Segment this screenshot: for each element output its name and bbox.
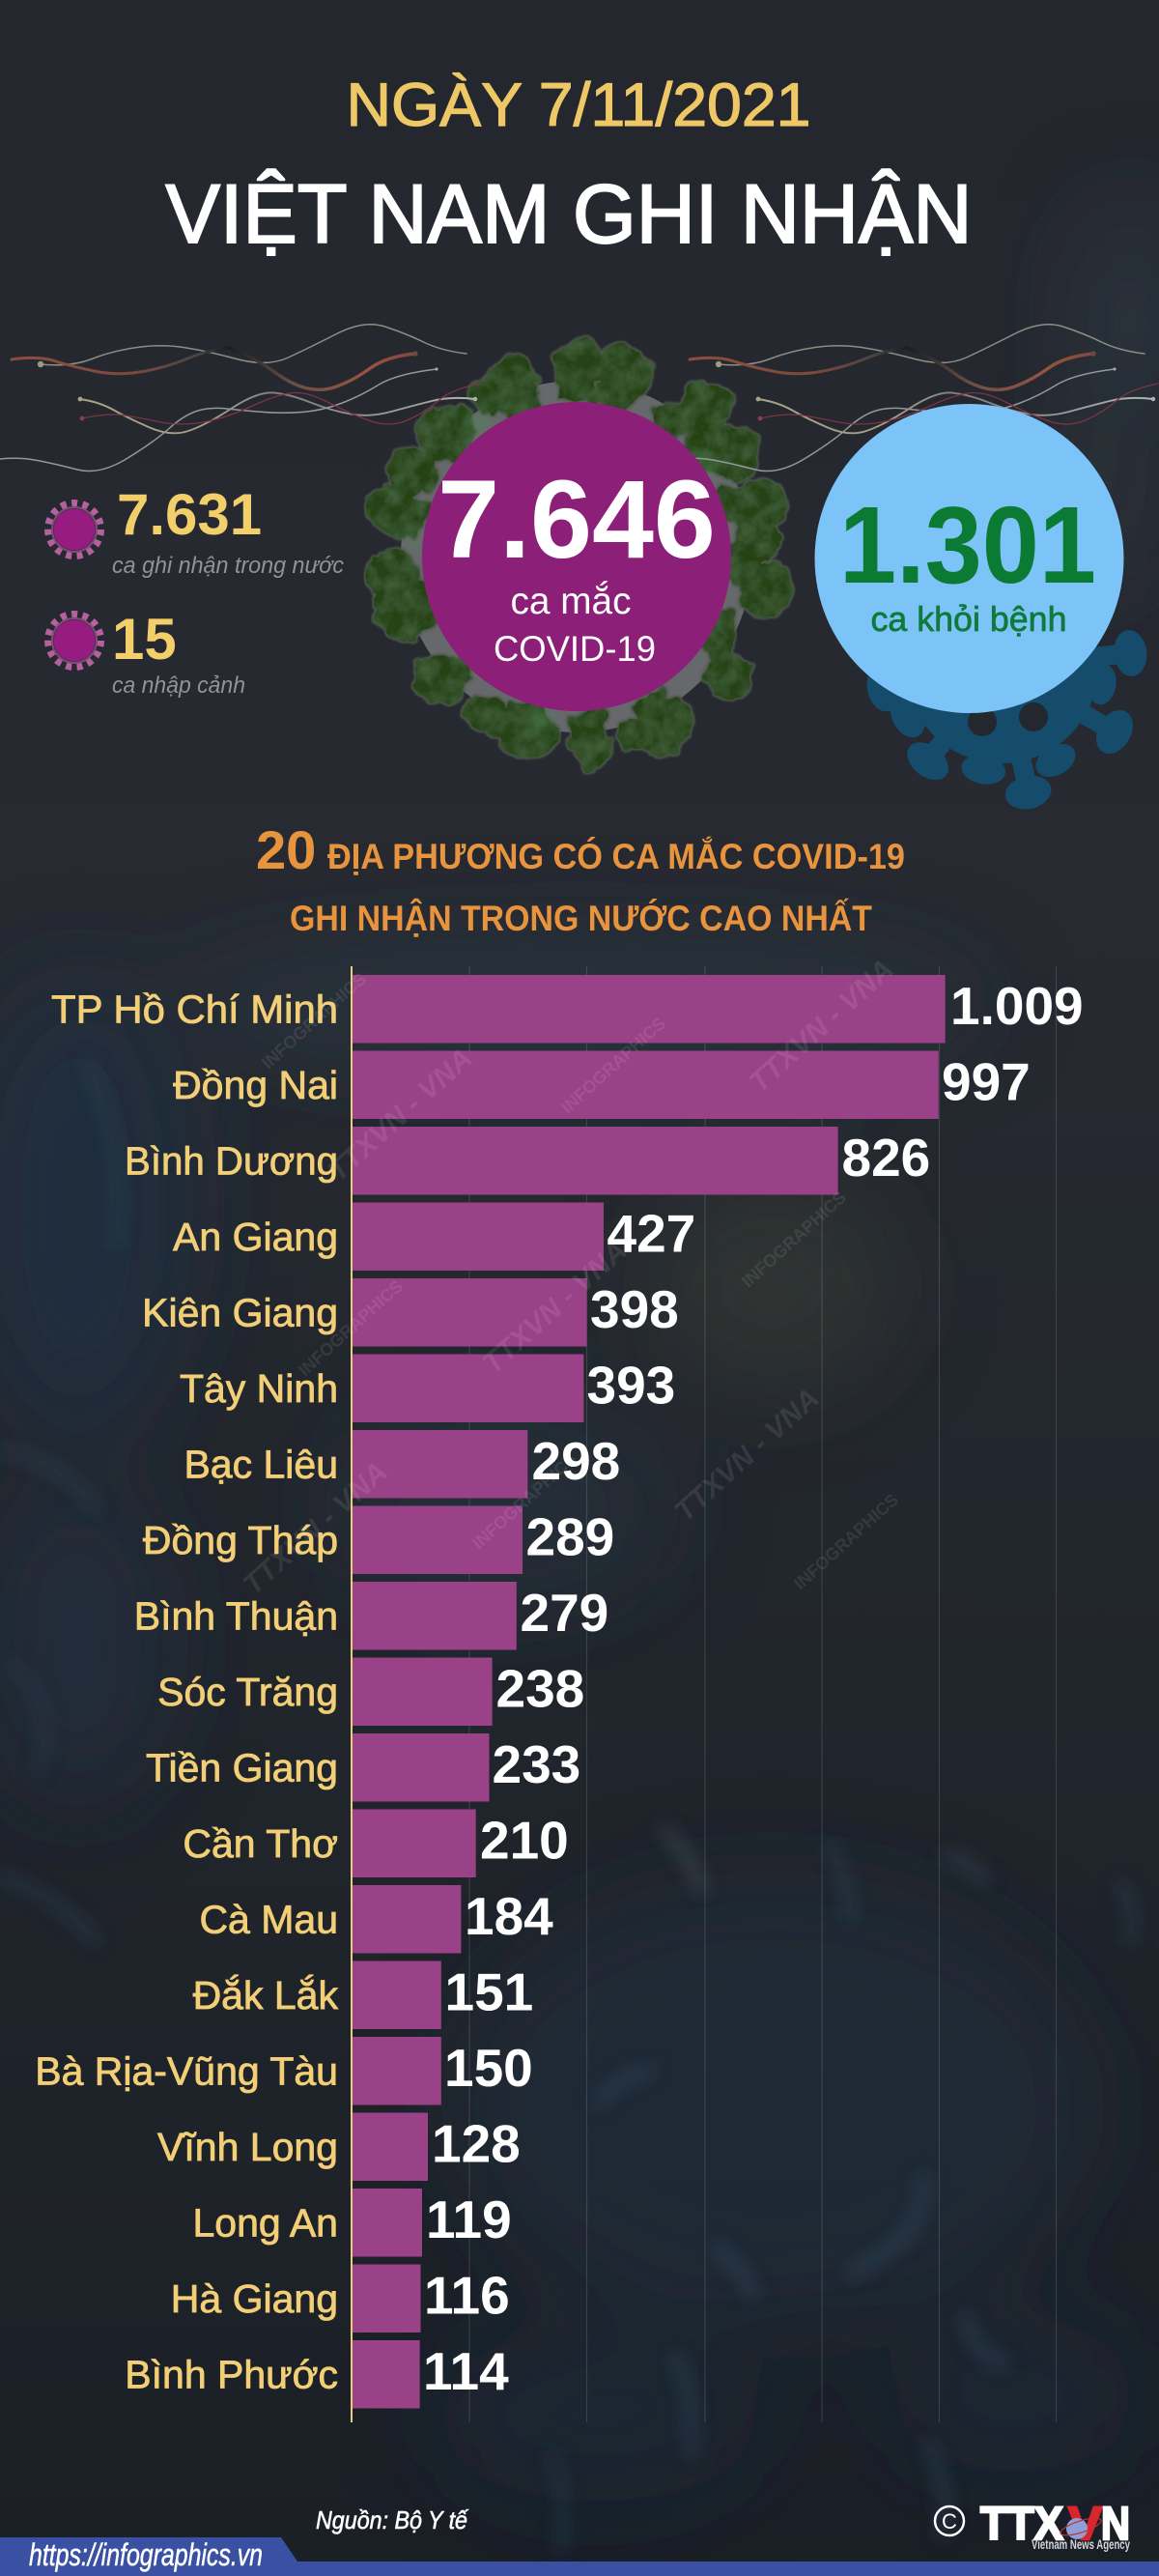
watermarks: INFOGRAPHICS [258, 969, 370, 1073]
row: Cần Thơ [183, 1809, 569, 1877]
imported label: ca nhập cảnh [112, 673, 245, 699]
row: Đắk Lắk: Đắk Lắk [193, 1973, 338, 2018]
wavy lines: left group [0, 325, 480, 472]
row: Long An: Long An [193, 2201, 338, 2246]
row: Bình Phước: Bình Phước [125, 2352, 338, 2396]
heading line 2: GHI NHẬN TRONG NƯỚC CAO NHẤT [290, 898, 872, 938]
row: Bình Thuận: 279 [520, 1583, 608, 1643]
row: Cần Thơ: Cần Thơ [183, 1821, 338, 1866]
illustration: green coronavirus [368, 338, 790, 767]
row: Bình Phước: 114 [423, 2341, 509, 2401]
total cases label line 1: ca mắc [510, 581, 632, 622]
watermarks: INFOGRAPHICS [468, 1449, 580, 1553]
total cases label line 2: COVID-19 [494, 629, 656, 669]
row: Bà Rịa-Vũng Tàu [35, 2037, 533, 2104]
row: Sóc Trăng [157, 1658, 584, 1726]
row: Bình Dương: Bình Dương [125, 1138, 338, 1183]
watermarks: TTXVN - VNA [323, 1043, 479, 1188]
icon: small purple virus [48, 502, 100, 557]
row: Kiên Giang [142, 1278, 679, 1347]
row: Vĩnh Long: 128 [432, 2114, 521, 2174]
watermarks: TTXVN - VNA [669, 1383, 826, 1528]
row: TP Hồ Chí Minh: TP Hồ Chí Minh [51, 987, 338, 1032]
row: Tiền Giang: 233 [493, 1734, 580, 1794]
row: Cà Mau [199, 1885, 553, 1954]
icon: copyright mark [935, 2506, 964, 2535]
total cases number: 7.646 [438, 458, 716, 582]
row: Đồng Tháp [143, 1505, 614, 1574]
row: Đắk Lắk: 151 [444, 1961, 533, 2021]
row: Tây Ninh: 393 [587, 1355, 675, 1415]
row: Tiền Giang: Tiền Giang [146, 1745, 338, 1789]
row: Kiên Giang: 398 [590, 1279, 679, 1339]
row: Bà Rịa-Vũng Tàu: Bà Rịa-Vũng Tàu [35, 2048, 338, 2093]
logo: TTXVN wordmark: N [1101, 2499, 1130, 2550]
logo: TTXVN wordmark [980, 2499, 1130, 2550]
row: Đồng Nai: Đồng Nai [173, 1063, 338, 1107]
icon: copyright mark: C [942, 2509, 957, 2533]
logo: TTXVN wordmark: TTX [980, 2499, 1063, 2550]
imported number: 15 [112, 607, 177, 672]
row: An Giang: An Giang [173, 1215, 338, 1259]
row: Tây Ninh: Tây Ninh [180, 1366, 338, 1411]
stat circle: total cases [422, 402, 731, 711]
domestic number: 7.631 [117, 482, 262, 547]
row: An Giang [173, 1202, 695, 1271]
row: Bình Thuận: Bình Thuận [134, 1594, 338, 1639]
row: Hà Giang [171, 2265, 510, 2333]
row: Vĩnh Long [157, 2112, 521, 2181]
source note: Nguồn: Bộ Y tế [316, 2505, 468, 2534]
row: An Giang: 427 [607, 1204, 695, 1264]
logo: TTXVN wordmark: V [1068, 2499, 1102, 2550]
recovered label: ca khỏi bệnh [871, 599, 1066, 639]
title: date: NGÀY 7/11/2021 [346, 72, 811, 139]
row: Hà Giang: Hà Giang [171, 2276, 338, 2321]
row: Bình Dương: 826 [842, 1128, 930, 1188]
chart heading [256, 819, 905, 938]
row: Hà Giang: 116 [424, 2265, 510, 2325]
stat circle: recovered [815, 404, 1124, 713]
bar chart [35, 966, 1084, 2422]
stat: imported cases [48, 607, 245, 699]
copyright logo [935, 2499, 1130, 2552]
row: Long An: 119 [426, 2190, 512, 2249]
watermarks: TTXVN - VNA [477, 1235, 634, 1380]
row: Vĩnh Long: Vĩnh Long [157, 2125, 338, 2169]
heading line 1: ĐỊA PHƯƠNG CÓ CA MẮC COVID-19 [327, 836, 905, 876]
row: Bạc Liêu: Bạc Liêu [184, 1442, 338, 1486]
chart axis [351, 966, 353, 2422]
row: Sóc Trăng: 238 [496, 1658, 584, 1718]
row: Cà Mau: 184 [465, 1886, 553, 1946]
row: Tiền Giang [146, 1733, 580, 1801]
domestic label: ca ghi nhận trong nước [112, 553, 344, 579]
row: Bạc Liêu [184, 1430, 620, 1498]
row: Đồng Nai [173, 1051, 1031, 1119]
row: Tây Ninh [180, 1355, 675, 1422]
row: Bình Dương [125, 1127, 930, 1194]
row: Bình Thuận [134, 1582, 608, 1650]
row: Đắk Lắk [193, 1961, 533, 2029]
row: Đồng Tháp: 289 [525, 1507, 614, 1567]
icon: small purple virus [48, 615, 100, 667]
url text: https://infographics.vn [29, 2537, 263, 2572]
row: Bình Phước [125, 2340, 509, 2408]
footer band with url tab [0, 2537, 1159, 2576]
watermarks: TTXVN - VNA [744, 954, 900, 1099]
row: Bà Rịa-Vũng Tàu: 150 [444, 2038, 533, 2098]
blue virus icon [863, 570, 1149, 814]
watermarks: TTXVN - VNA [238, 1456, 394, 1601]
title: main heading: VIỆT NAM GHI NHẬN [166, 168, 972, 261]
wavy lines: right group [678, 325, 1158, 472]
stat: domestic cases [48, 482, 344, 579]
row: TP Hồ Chí Minh: 1.009 [950, 976, 1084, 1036]
heading line 1: 20 [256, 819, 316, 880]
row: Bạc Liêu: 298 [531, 1431, 620, 1491]
row: Cần Thơ: 210 [480, 1811, 569, 1871]
watermarks [238, 954, 902, 1601]
row: Kiên Giang: Kiên Giang [142, 1291, 338, 1335]
row: Cà Mau: Cà Mau [199, 1898, 338, 1942]
watermarks: INFOGRAPHICS [790, 1490, 902, 1593]
row: Đồng Nai: 997 [942, 1051, 1031, 1111]
row: Đồng Tháp: Đồng Tháp [143, 1518, 338, 1562]
row: Long An [193, 2189, 512, 2257]
watermarks: INFOGRAPHICS [557, 1014, 669, 1117]
recovered number: 1.301 [839, 484, 1096, 606]
row: Sóc Trăng: Sóc Trăng [157, 1670, 338, 1714]
watermarks: INFOGRAPHICS [738, 1188, 850, 1291]
row: TP Hồ Chí Minh [51, 975, 1084, 1044]
watermarks: INFOGRAPHICS [295, 1276, 407, 1380]
